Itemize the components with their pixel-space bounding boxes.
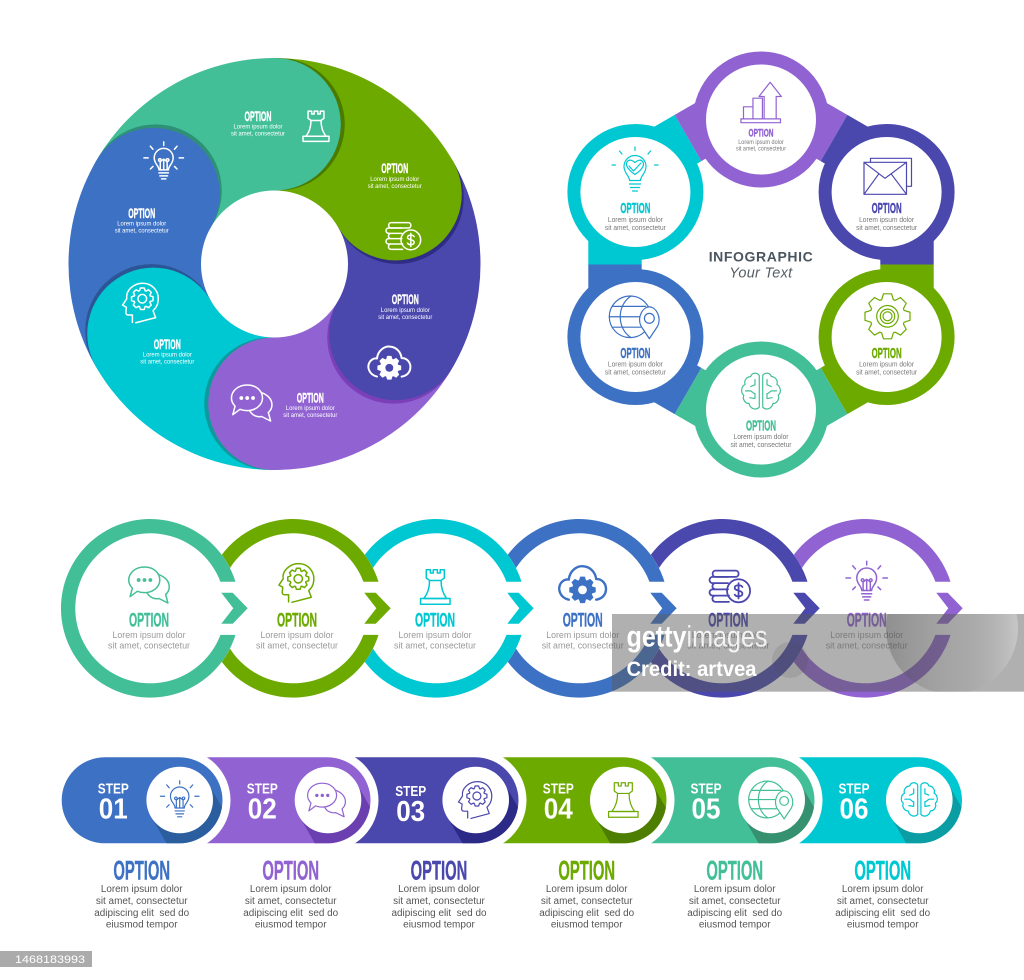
wheel text: cyan [140, 337, 194, 366]
step 3 caption: OPTION [411, 855, 467, 885]
ring connector bands [588, 79, 934, 450]
wheel segment: cyan body [96, 301, 274, 470]
chain item 5: OPTION [708, 610, 748, 631]
chain item 1 [108, 567, 190, 650]
node: teal brain [693, 342, 829, 478]
step 1: 01 [99, 794, 128, 826]
step 6: STEP [838, 780, 870, 798]
chain item 5 [687, 571, 769, 650]
step 5: STEP [690, 780, 722, 798]
node: cyan bulb check: sit amet, consectetur [605, 223, 666, 232]
panel: step timeline [62, 749, 998, 930]
wheel text: green: Lorem ipsum dolor [370, 176, 419, 183]
ring centre title: INFOGRAPHIC [709, 249, 813, 265]
chain item 6 [826, 561, 908, 650]
wheel text: purple: sit amet, consectetur [283, 412, 337, 419]
icon: chat bubbles [231, 385, 272, 421]
wheel text: teal: OPTION [244, 109, 272, 124]
step 6 caption: sit amet, consectetur [837, 896, 929, 907]
wheel segment: indigo body [338, 161, 480, 367]
chain item 2: sit amet, consectetur [256, 640, 338, 650]
step 5 caption: eiusmod tempor [699, 920, 771, 930]
wheel text: indigo: OPTION [392, 292, 419, 307]
step 5 caption: Lorem ipsum dolor [694, 884, 776, 895]
wheel text: teal: sit amet, consectetur [231, 131, 285, 138]
step 3 [354, 757, 526, 844]
node: indigo envelope: sit amet, consectetur [856, 223, 918, 232]
chain ring 5: indigo [633, 519, 820, 698]
step 3: 03 [396, 796, 425, 828]
wheel text: blue: sit amet, consectetur [115, 228, 169, 234]
chain ring 3: cyan [347, 519, 534, 698]
step 3 caption: eiusmod tempor [403, 920, 476, 930]
panel: chevron chain [61, 519, 963, 698]
icon: cloud gear [368, 347, 410, 380]
chain item 3: OPTION [415, 610, 455, 631]
chain ring 1: teal [61, 519, 248, 698]
step 6 caption [835, 855, 931, 930]
step 1 [62, 757, 230, 844]
step 2: STEP [247, 780, 278, 798]
chain item 5: Lorem ipsum dolor [692, 630, 765, 640]
step 3 caption [392, 855, 487, 930]
wheel text: indigo: sit amet, consectetur [378, 314, 432, 321]
node: indigo envelope: OPTION [872, 200, 902, 217]
chain item 3: sit amet, consectetur [394, 640, 476, 650]
node: indigo envelope: Lorem ipsum dolor [859, 215, 915, 224]
node: purple chart: Lorem ipsum dolor [738, 140, 784, 146]
icon: rook [303, 111, 329, 141]
node: teal brain: Lorem ipsum dolor [734, 432, 789, 441]
step 5 caption: adipiscing elit sed do [687, 908, 783, 919]
step 5 caption: OPTION [706, 855, 763, 885]
chain item 3 [394, 570, 476, 650]
step 4 caption [539, 855, 635, 930]
step 4 caption: sit amet, consectetur [541, 896, 633, 907]
wheel text: indigo: Lorem ipsum dolor [381, 307, 430, 314]
step 2 [206, 757, 378, 844]
step 5 caption [687, 855, 783, 930]
step 3: STEP [395, 783, 426, 800]
step 6 caption: eiusmod tempor [847, 920, 919, 930]
wheel text: cyan: sit amet, consectetur [140, 358, 194, 366]
step 1: STEP [98, 780, 129, 798]
node: teal brain: sit amet, consectetur [730, 440, 792, 449]
step 6 caption: adipiscing elit sed do [835, 908, 931, 919]
chain item 2: OPTION [277, 610, 317, 631]
step 1 caption: eiusmod tempor [106, 920, 178, 930]
wheel text: purple: Lorem ipsum dolor [286, 405, 335, 412]
chain item 1: sit amet, consectetur [108, 640, 190, 650]
wheel head: cyan [87, 268, 220, 400]
icon: bulb [144, 142, 183, 179]
watermark band: gettyimages [626, 620, 768, 654]
node: purple chart: sit amet, consectetur [736, 146, 786, 152]
step 2 caption [243, 855, 339, 930]
wheel segment: green body [274, 58, 453, 227]
image id badge [0, 951, 92, 967]
step 6 [798, 757, 962, 844]
chain item 6: sit amet, consectetur [826, 640, 908, 650]
step 1 caption: adipiscing elit sed do [94, 908, 190, 919]
panel: hexagonal ring [567, 52, 955, 478]
wheel text: purple: OPTION [297, 391, 324, 406]
step 4: STEP [543, 780, 574, 798]
wheel head: teal [208, 58, 341, 190]
step 6 caption: OPTION [854, 855, 911, 885]
chain item 2: Lorem ipsum dolor [260, 630, 334, 640]
step 1 caption: Lorem ipsum dolor [101, 884, 183, 895]
step 3 caption: Lorem ipsum dolor [398, 884, 481, 895]
wheel text: green: sit amet, consectetur [368, 183, 422, 190]
step 4: 04 [544, 794, 573, 826]
chain item 4: OPTION [563, 610, 603, 631]
step 1 caption: OPTION [113, 855, 170, 885]
chain item 6: Lorem ipsum dolor [830, 630, 903, 640]
chain item 1: Lorem ipsum dolor [112, 630, 186, 640]
chain item 3: Lorem ipsum dolor [398, 630, 472, 640]
wheel head: indigo [329, 268, 462, 400]
step 4 caption: eiusmod tempor [551, 920, 623, 930]
wheel text: green [368, 161, 422, 190]
step 6 caption: Lorem ipsum dolor [842, 884, 924, 895]
panel: swirl wheel [69, 58, 480, 470]
wheel segment: purple body [274, 301, 453, 470]
wheel head: green [329, 128, 462, 260]
step 3 caption: sit amet, consectetur [393, 896, 486, 907]
wheel text: blue [115, 206, 169, 234]
step 5 caption: sit amet, consectetur [689, 896, 781, 907]
ring centre title: Your Text [729, 266, 793, 282]
step 2 caption: sit amet, consectetur [245, 896, 337, 907]
icon: head gear [123, 283, 158, 323]
wheel text: teal [231, 109, 285, 138]
step 6: 06 [840, 794, 868, 826]
step 2 caption: eiusmod tempor [255, 920, 327, 930]
node: green gear: sit amet, consectetur [856, 368, 918, 376]
chain item 2 [256, 564, 338, 650]
node: green gear: OPTION [872, 345, 902, 362]
wheel text: indigo [378, 292, 432, 321]
wheel text: blue: OPTION [128, 206, 155, 221]
step 4 [502, 757, 674, 844]
node: purple chart: OPTION [748, 127, 774, 139]
step 4 caption: adipiscing elit sed do [539, 908, 635, 919]
step 3 caption: adipiscing elit sed do [392, 908, 487, 919]
node: blue globe: Lorem ipsum dolor [608, 360, 663, 368]
watermark band [612, 614, 1024, 692]
step 5: 05 [692, 794, 720, 826]
node: cyan bulb check [567, 124, 703, 260]
wheel text: blue: Lorem ipsum dolor [117, 220, 166, 228]
step 5 [650, 757, 822, 844]
step 4 caption: OPTION [558, 855, 615, 885]
wheel text: purple [283, 391, 337, 419]
node: blue globe: sit amet, consectetur [605, 368, 666, 376]
step 2 caption: adipiscing elit sed do [243, 908, 339, 919]
node: cyan bulb check: OPTION [620, 200, 650, 217]
step 2: 02 [248, 794, 277, 826]
node: cyan bulb check: Lorem ipsum dolor [608, 215, 663, 224]
wheel segment: teal body [96, 58, 274, 227]
step 1 caption: sit amet, consectetur [96, 896, 188, 907]
chain item 5: sit amet, consectetur [687, 640, 769, 650]
image id badge: 1468183993 [15, 954, 85, 966]
icon: coins [386, 223, 421, 250]
node: teal brain: OPTION [746, 418, 776, 434]
chain item 1: OPTION [129, 610, 169, 631]
chain item 4: Lorem ipsum dolor [546, 630, 619, 640]
wheel text: cyan: OPTION [154, 337, 181, 352]
chain item 4 [542, 566, 624, 650]
step 2 caption: Lorem ipsum dolor [250, 884, 332, 895]
chain item 4: sit amet, consectetur [542, 640, 624, 650]
node: purple chart [693, 52, 829, 188]
chain ring 4: blue [490, 519, 677, 698]
step 2 caption: OPTION [262, 855, 319, 885]
watermark band: Credit: artvea [626, 658, 757, 681]
node: green gear [819, 269, 955, 405]
wheel text: green: OPTION [381, 161, 408, 176]
step 1 caption [94, 855, 190, 930]
chain ring 6: purple [776, 519, 963, 698]
wheel segment: blue body [69, 161, 211, 367]
chain item 6: OPTION [847, 610, 887, 631]
node: green gear: Lorem ipsum dolor [859, 360, 915, 368]
node: indigo envelope [819, 124, 955, 260]
node: blue globe: OPTION [620, 345, 650, 362]
chain ring 2: green [204, 519, 391, 698]
wheel text: cyan: Lorem ipsum dolor [143, 352, 192, 358]
ring centre title [709, 249, 813, 282]
wheel head: purple [208, 338, 341, 470]
wheel text: teal: Lorem ipsum dolor [234, 124, 282, 131]
wheel shadows under segment heads [85, 58, 464, 470]
step 4 caption: Lorem ipsum dolor [546, 884, 628, 895]
wheel head: blue [87, 128, 220, 260]
node: blue globe [567, 269, 703, 405]
